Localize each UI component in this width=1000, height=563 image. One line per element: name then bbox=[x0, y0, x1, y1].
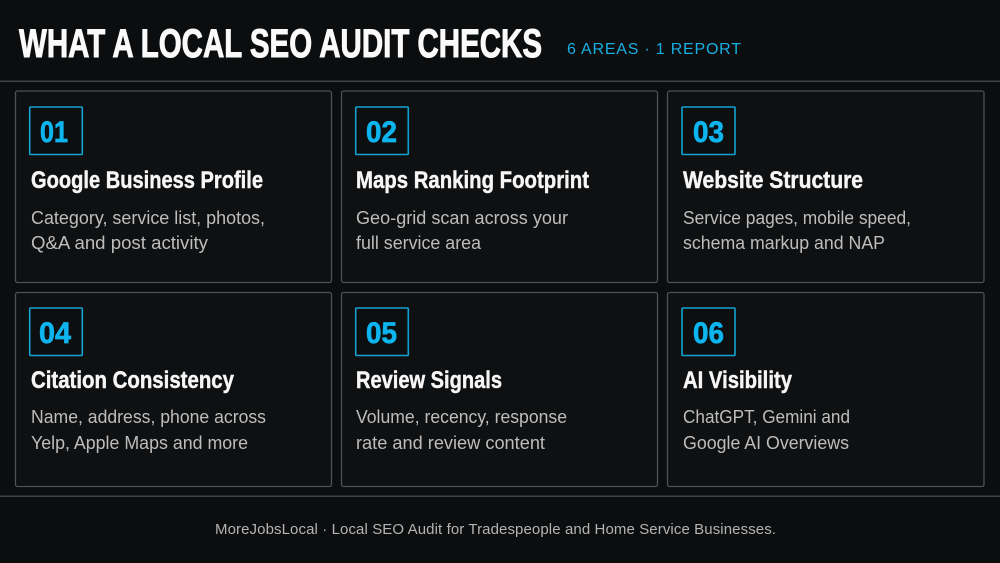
panel: Citation Consistency bbox=[16, 292, 332, 486]
heading: AI Visibility bbox=[683, 367, 793, 394]
description: Volume, recency, response bbox=[356, 407, 567, 427]
number badge 06: 06 bbox=[693, 317, 724, 350]
heading: Website Structure bbox=[683, 167, 863, 194]
number badge 04 bbox=[30, 308, 82, 356]
description: full service area bbox=[356, 233, 482, 253]
number badge 02: 02 bbox=[366, 116, 397, 149]
description: Google AI Overviews bbox=[683, 433, 849, 453]
number badge 01: 01 bbox=[40, 116, 68, 149]
panel: Maps Ranking Footprint bbox=[342, 91, 658, 282]
description: Q&A and post activity bbox=[31, 233, 208, 253]
description: Name, address, phone across bbox=[31, 407, 266, 427]
number badge 02 bbox=[356, 107, 408, 154]
number badge 03: 03 bbox=[693, 116, 724, 149]
number badge 06 bbox=[682, 308, 735, 356]
description: schema markup and NAP bbox=[683, 233, 885, 253]
number badge 01 bbox=[30, 107, 82, 154]
panel: AI Visibility bbox=[668, 292, 984, 486]
heading: Google Business Profile bbox=[31, 167, 263, 194]
subtitle: 6 AREAS · 1 REPORT bbox=[567, 41, 741, 58]
description: Category, service list, photos, bbox=[31, 208, 265, 228]
description bbox=[31, 407, 266, 453]
number badge 04: 04 bbox=[39, 317, 71, 350]
number badge 03 bbox=[682, 107, 735, 154]
heading: Maps Ranking Footprint bbox=[356, 167, 589, 194]
panel: Google Business Profile bbox=[16, 91, 332, 282]
panel: Review Signals bbox=[342, 292, 658, 486]
description: Service pages, mobile speed, bbox=[683, 208, 911, 228]
heading: Review Signals bbox=[356, 367, 502, 394]
description: ChatGPT, Gemini and bbox=[683, 407, 850, 427]
number badge 05: 05 bbox=[366, 317, 397, 350]
description bbox=[31, 208, 265, 253]
footer text: MoreJobsLocal · Local SEO Audit for Tradespeople and Home Service Businesses. bbox=[215, 521, 776, 538]
panel: Website Structure bbox=[668, 91, 984, 282]
description bbox=[683, 407, 850, 453]
title: WHAT A LOCAL SEO AUDIT CHECKS bbox=[19, 22, 542, 66]
description: Yelp, Apple Maps and more bbox=[31, 433, 248, 453]
description bbox=[356, 208, 568, 253]
description bbox=[683, 208, 911, 253]
number badge 05 bbox=[356, 308, 408, 356]
heading: Citation Consistency bbox=[31, 367, 235, 394]
description bbox=[356, 407, 567, 453]
description: Geo-grid scan across your bbox=[356, 208, 568, 228]
description: rate and review content bbox=[356, 433, 545, 453]
